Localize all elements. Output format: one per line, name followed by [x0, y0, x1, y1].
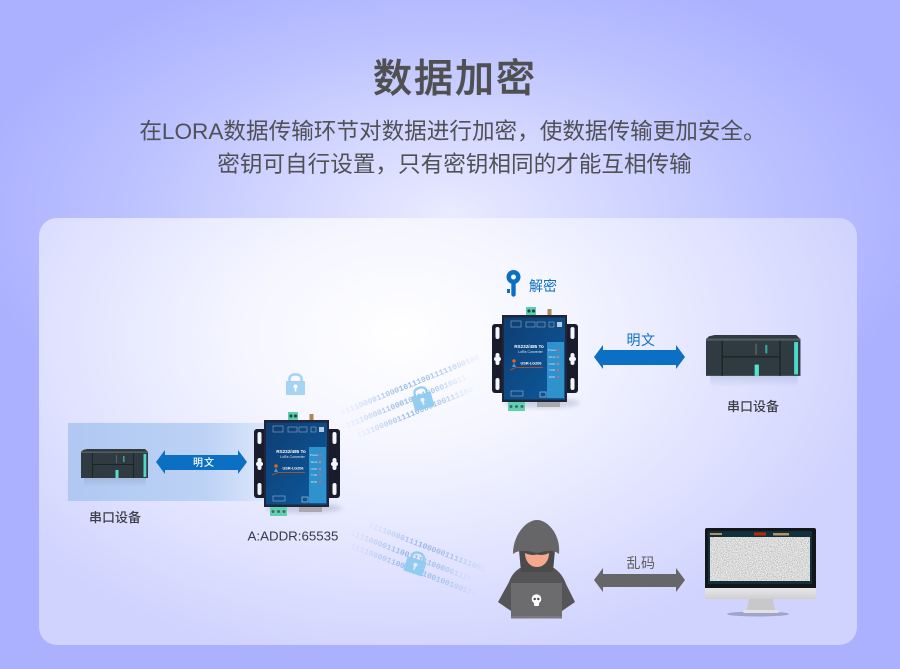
device: sender LoRa converter: Power	[310, 453, 318, 457]
device: receiver LoRa converter: TXD	[549, 368, 556, 372]
label: decrypt: 解密	[529, 278, 557, 294]
title: 数据加密	[373, 58, 537, 101]
device: sender LoRa converter: Work	[311, 460, 318, 464]
encrypted data stream: upper: 1111000011000101110011111000100	[340, 354, 481, 418]
device: sender LoRa converter: RS232/485 To	[276, 449, 306, 454]
device: sender LoRa converter: RXD	[311, 480, 318, 484]
icon: right serial device	[706, 335, 800, 387]
icon: skull on laptop	[532, 594, 541, 606]
device: sender LoRa converter: TXD	[311, 473, 318, 477]
device: receiver LoRa converter: USR-LG206	[521, 362, 541, 366]
encrypted data stream: upper: 11110000011110000100111100	[356, 386, 475, 441]
device: receiver LoRa converter: RXD	[549, 375, 556, 379]
encrypted data stream: lower: 11110000111100000111111001	[367, 521, 487, 575]
label: sender address: A:ADDR:65535	[248, 528, 338, 544]
device: sender LoRa converter: LoRa Converter	[280, 455, 306, 459]
label: right plaintext: 明文	[626, 332, 656, 348]
icon: left serial device	[81, 449, 148, 487]
subtitle text: 密钥可自行设置，只有密钥相同的才能互相传输	[217, 152, 692, 177]
device: sender LoRa converter	[254, 412, 342, 516]
label: plaintext on arrow: 明文	[193, 456, 215, 469]
encrypted data stream: upper: 111100001100010111000010011	[345, 374, 468, 431]
encrypted data stream: lower: 111100001110011111000001111	[349, 529, 473, 584]
icon: hacker with laptop	[498, 520, 575, 618]
label: garbled text: 乱码	[626, 555, 656, 571]
label: left serial device: 串口设备	[89, 510, 141, 525]
icon: monitor showing garbled text	[705, 528, 816, 616]
icon: decryption key	[506, 270, 521, 297]
icon: lock above sender	[286, 374, 305, 395]
panel: encryption diagram	[39, 218, 857, 645]
device: receiver LoRa converter: LINK	[549, 362, 555, 366]
device: receiver LoRa converter: Work	[549, 355, 556, 359]
device: receiver LoRa converter: Power	[548, 348, 556, 352]
device: sender LoRa converter: USR-LG206	[283, 466, 303, 470]
subtitle text: 在LORA数据传输环节对数据进行加密，使数据传输更加安全。	[139, 119, 766, 144]
device: receiver LoRa converter	[492, 307, 580, 411]
device: sender LoRa converter: LINK	[311, 467, 317, 471]
encrypted data stream: lower: 1111000011000111100100100111	[349, 542, 478, 599]
arrow: right plaintext	[594, 345, 685, 369]
device: receiver LoRa converter: LoRa Converter	[518, 350, 544, 354]
subtitle text	[139, 119, 766, 177]
left plaintext highlight band	[68, 423, 265, 501]
label: right serial device: 串口设备	[727, 399, 779, 414]
encrypted data stream: lower	[349, 521, 487, 599]
icon: lock on upper stream	[410, 385, 435, 411]
arrow: left plaintext	[156, 450, 247, 474]
device: receiver LoRa converter: RS232/485 To	[514, 344, 544, 349]
arrow: garbled data	[594, 568, 685, 592]
icon: lock on lower stream	[403, 550, 429, 577]
